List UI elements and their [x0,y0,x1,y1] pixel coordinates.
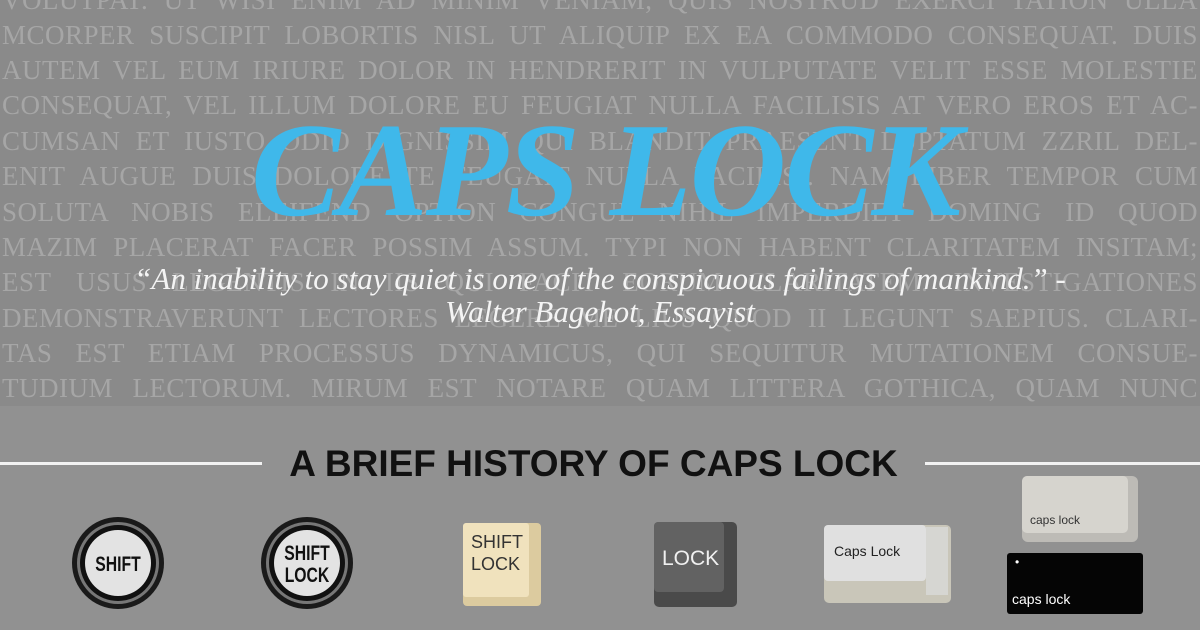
icon: Caps Lock key [824,525,951,603]
icon: round SHIFT LOCK key: SHIFT [284,541,330,565]
background lorem text: MCORPER SUSCIPIT LOBORTIS NISL UT ALIQUIP EX EA COMMODO CONSEQUAT. DUIS [2,20,1198,50]
bottom section background [0,406,1200,630]
quote: Walter Bagehot, Essayist [445,294,755,329]
background lorem text: MAZIM PLACERAT FACER POSSIM ASSUM. TYPI NON HABENT CLARITATEM INSITAM; [2,232,1198,262]
background lorem text: DEMONSTRAVERUNT LECTORES LEGERE ME LIUS QUOD II LEGUNT SAEPIUS. CLARI- [2,303,1198,333]
background lorem text: ENIT AUGUE DUIS DOLORE TE FEUGAIT NULLA FACILISI. NAM LIBER TEMPOR CUM [2,161,1198,191]
background lorem text: CUMSAN ET IUSTO ODIO DIGNISSIM QUI BLANDIT PRAESENT LUPTATUM ZZRIL DEL- [2,126,1198,156]
icon: round SHIFT key: SHIFT [95,552,141,576]
icon: dark LOCK key [654,522,737,607]
icon: cream SHIFT LOCK key [463,523,541,606]
quote [134,261,1066,329]
icon: black caps lock key [1007,553,1143,614]
icon: cream SHIFT LOCK key: LOCK [471,554,520,574]
icon: black caps lock key: caps lock [1012,591,1070,607]
section heading with rules [0,443,1200,484]
background lorem text: CONSEQUAT, VEL ILLUM DOLORE EU FEUGIAT NULLA FACILISIS AT VERO EROS ET AC- [2,90,1198,120]
icon: Caps Lock key: Caps Lock [834,543,900,559]
icon: black caps lock key: • [1015,555,1019,569]
background lorem text: TUDIUM LECTORUM. MIRUM EST NOTARE QUAM LITTERA GOTHICA, QUAM NUNC [2,373,1198,403]
quote: “An inability to stay quiet is one of the conspicuous failings of mankind.” - [134,261,1066,296]
background lorem text: AUTEM VEL EUM IRIURE DOLOR IN HENDRERIT IN VULPUTATE VELIT ESSE MOLESTIE [2,55,1198,85]
icon: light caps lock key [1022,476,1138,542]
background lorem text: SOLUTA NOBIS ELEIFEND OPTION CONGUE NIHIL IMPERDIET DOMING ID QUOD [2,197,1198,227]
background lorem text [2,0,1198,403]
icon: cream SHIFT LOCK key: SHIFT [471,532,523,552]
icon: dark LOCK key: LOCK [662,547,719,570]
background lorem text: EST USUS LEGENTIS IN IIS QUI FACIT EORUM CLARITATEM. INVESTIGATIONES [2,267,1198,297]
icon: round SHIFT key [72,517,164,609]
section heading with rules: A BRIEF HISTORY OF CAPS LOCK [289,443,898,484]
title: CAPS LOCK [251,96,959,244]
background lorem text: TAS EST ETIAM PROCESSUS DYNAMICUS, QUI SEQUITUR MUTATIONEM CONSUE- [2,338,1198,368]
icon: round SHIFT LOCK key: LOCK [285,563,330,587]
icon: light caps lock key: caps lock [1030,513,1080,527]
icon: round SHIFT LOCK key [261,517,353,609]
